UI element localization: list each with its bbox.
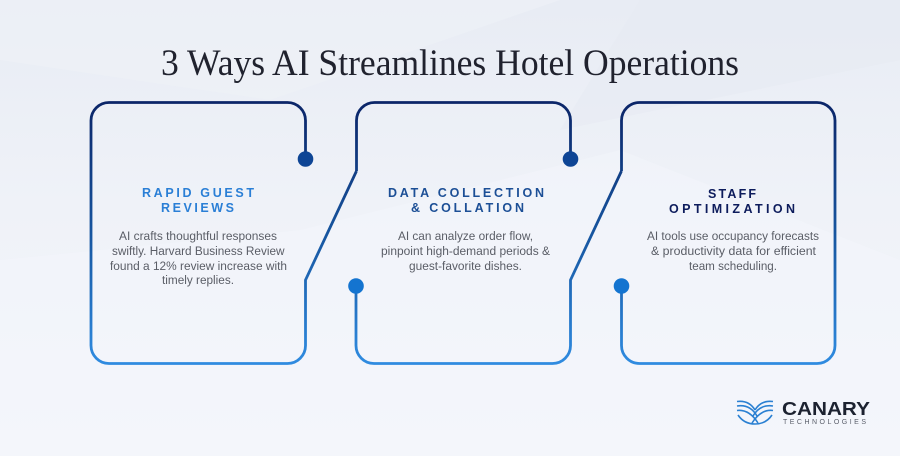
body text 2: guest-favorite dishes. (409, 259, 522, 273)
body text 2: AI can analyze order flow, (398, 229, 533, 243)
body text 1: swiftly. Harvard Business Review (112, 244, 285, 258)
body text 3: team scheduling. (689, 259, 777, 273)
logo: canary technologies (737, 399, 870, 426)
card outline 2 upper (356, 102, 570, 171)
heading: data collection and collation: & COLLATION (411, 201, 524, 215)
body text 1: timely replies. (162, 273, 234, 287)
heading: staff optimization: OPTIMIZATION (669, 202, 795, 216)
body text 3: AI tools use occupancy forecasts (647, 229, 819, 243)
body text 3: & productivity data for efficient (651, 244, 817, 258)
heading: staff optimization: STAFF (708, 187, 756, 201)
heading: staff optimization (669, 187, 795, 216)
card outline 1 (91, 102, 356, 364)
connector dot 3 (614, 278, 629, 294)
body text 1: found a 12% review increase with (110, 259, 287, 273)
body text 2 (381, 229, 551, 273)
panel: staff optimization (614, 102, 835, 364)
heading: rapid guest reviews: RAPID GUEST (142, 186, 254, 200)
body text 3 (647, 229, 819, 273)
wordmark: CANARY (782, 399, 870, 419)
body text 1 (110, 229, 287, 287)
body text 1: AI crafts thoughtful responses (119, 229, 277, 243)
heading: data collection and collation (388, 186, 544, 215)
title: 3 Ways AI Streamlines Hotel Operations (161, 43, 739, 84)
panel: data collection and collation (348, 102, 622, 364)
heading: rapid guest reviews (142, 186, 254, 215)
connector dot 2 end (563, 151, 578, 167)
card outline 2 lower (356, 171, 622, 364)
heading: rapid guest reviews: REVIEWS (161, 201, 234, 215)
icon: canary wings (737, 401, 773, 424)
tagline: TECHNOLOGIES (783, 419, 866, 426)
card outline 3 (622, 102, 835, 364)
connector dot 1 (298, 151, 313, 167)
connector dot 2 start (348, 278, 364, 294)
heading: data collection and collation: DATA COLLECTION (388, 186, 544, 200)
body text 2: pinpoint high-demand periods & (381, 244, 551, 258)
panel: rapid guest reviews (91, 102, 356, 364)
